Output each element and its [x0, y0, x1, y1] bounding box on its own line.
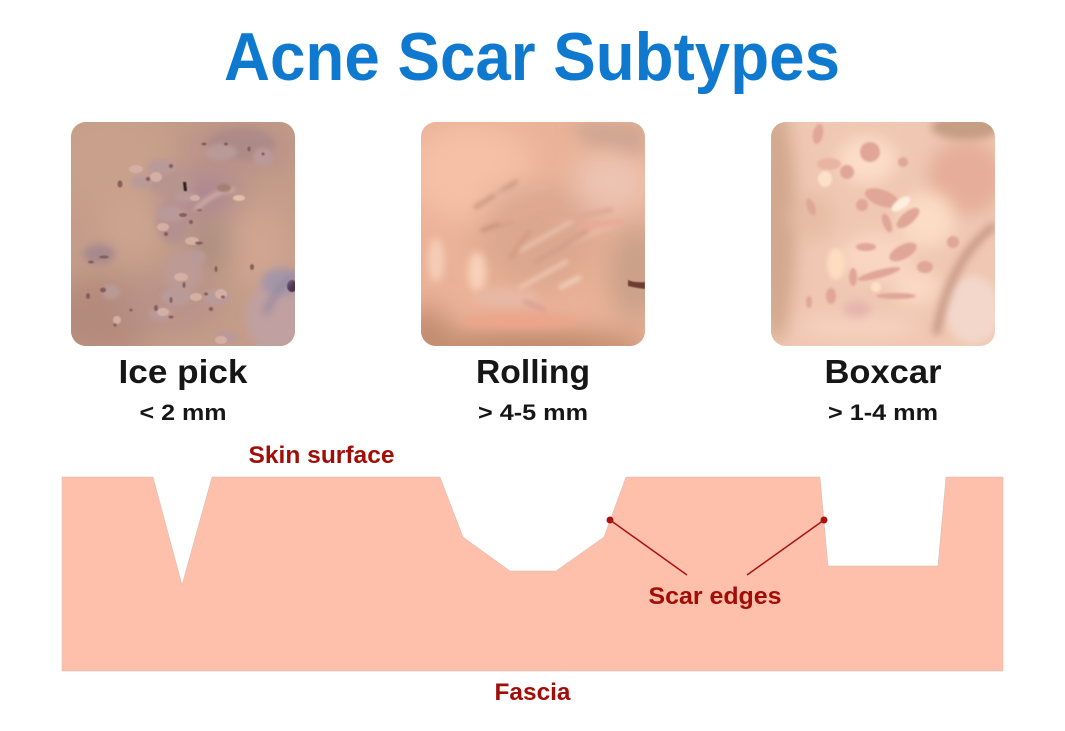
scar edges label: Scar edges: [648, 583, 782, 610]
fascia label: Fascia: [494, 679, 571, 706]
scar edge pointer: boxcar: [747, 516, 828, 575]
title: Acne Scar Subtypes: [224, 19, 840, 95]
label: ice pick: Ice pick: [118, 354, 248, 391]
panel: boxcar photo: [771, 122, 995, 346]
label: rolling: Rolling: [476, 354, 590, 391]
size: rolling: > 4-5 mm: [478, 400, 588, 425]
skin surface label: Skin surface: [248, 442, 394, 469]
size: ice pick: < 2 mm: [140, 400, 226, 425]
size: boxcar: > 1-4 mm: [828, 400, 938, 425]
label: boxcar: Boxcar: [824, 354, 942, 391]
scar edge pointer: rolling: [606, 516, 687, 575]
panel: ice pick photo: [71, 122, 295, 346]
skin cross-section diagram: [62, 477, 1003, 671]
panel: rolling photo: [421, 122, 645, 346]
